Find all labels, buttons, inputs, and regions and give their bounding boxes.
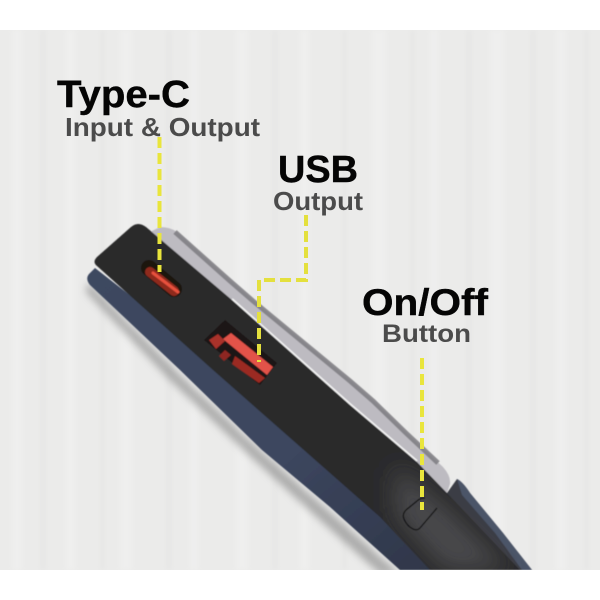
label: Button: Button (382, 320, 471, 348)
icon: Type-C port (149, 268, 178, 292)
USB red tongue (223, 333, 273, 375)
blue back shell (87, 268, 440, 570)
label: Input & Output: Input & Output (65, 112, 260, 142)
icon: USB port (204, 320, 277, 385)
label: Type-C: Type-C (57, 74, 190, 116)
label: On/Off: On/Off (362, 282, 489, 323)
translucent glass edge (150, 227, 450, 493)
leader line: Type-C (158, 137, 162, 272)
label: Output: Output (273, 186, 363, 216)
icon: on/off button (403, 498, 437, 530)
device shadow (86, 282, 400, 574)
black port face (94, 224, 520, 570)
label: USB: USB (278, 149, 358, 191)
power bank device (87, 224, 532, 570)
blue highlight on right section (457, 479, 532, 570)
dark right section (446, 478, 532, 570)
leader line: USB (259, 215, 306, 362)
leader line: On/Off (420, 358, 424, 510)
